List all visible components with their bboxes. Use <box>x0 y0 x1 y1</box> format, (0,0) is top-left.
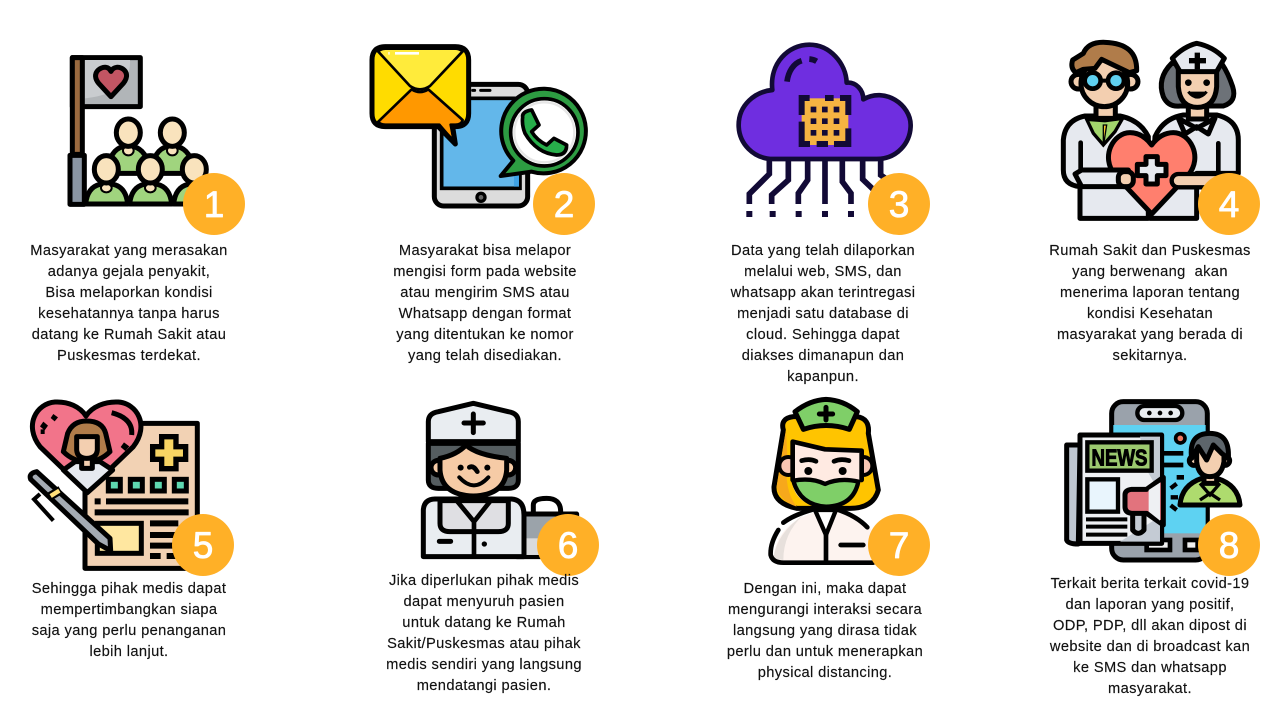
badge 5: 5 <box>193 525 213 566</box>
text block: step 7: physical distancing. <box>758 665 892 681</box>
text block: step 6: Jika diperlukan pihak medis <box>389 573 579 589</box>
text block: step 4: menerima laporan tentang <box>1060 285 1240 301</box>
icon: cloud database <box>739 45 911 217</box>
text block: step 6: mendatangi pasien. <box>417 678 551 694</box>
text block: step 8 <box>1049 576 1250 697</box>
text block: step 7: langsung yang dirasa tidak <box>733 623 917 639</box>
text block: step 1: Masyarakat yang merasakan <box>30 243 228 259</box>
text block: step 1 <box>30 243 228 364</box>
text block: step 2: Masyarakat bisa melapor <box>399 243 571 259</box>
text block: step 2: yang ditentukan ke nomor <box>396 327 574 343</box>
text block: step 3: Data yang telah dilaporkan <box>731 243 915 259</box>
text block: step 8: website dan di broadcast kan <box>1049 639 1250 655</box>
text block: step 3: diakses dimanapun dan <box>742 348 904 364</box>
text block: step 8: ODP, PDP, dll akan dipost di <box>1053 618 1247 634</box>
badge 4: 4 <box>1219 184 1239 225</box>
text block: step 7: perlu dan untuk menerapkan <box>727 644 923 660</box>
text block: step 1: Puskesmas terdekat. <box>57 348 201 364</box>
text block: step 4: kondisi Kesehatan <box>1087 306 1213 322</box>
text block: step 7: mengurangi interaksi secara <box>728 602 923 618</box>
icon: tablet, envelope and chat <box>372 47 586 206</box>
text block: step 3: kapanpun. <box>787 369 859 385</box>
text block: step 3: whatsapp akan terintregasi <box>730 285 915 301</box>
icon: nurse with medical bag <box>423 403 577 557</box>
text block: step 5: lebih lanjut. <box>90 644 168 660</box>
icon: newspaper, phone and megaphone <box>1067 402 1240 560</box>
text block: step 2: mengisi form pada website <box>393 264 577 280</box>
text block: step 8: ke SMS dan whatsapp <box>1073 660 1227 676</box>
badge 6: 6 <box>558 525 578 566</box>
text block: step 1: Bisa melaporkan kondisi <box>45 285 213 301</box>
badge 3 <box>868 173 930 235</box>
text block: step 4 <box>1049 243 1251 364</box>
text block: step 4: yang berwenang akan <box>1072 264 1228 280</box>
text block: step 2: yang telah disediakan. <box>408 348 562 364</box>
badge 7: 7 <box>889 525 909 566</box>
text block: step 2: Whatsapp dengan format <box>399 306 571 322</box>
badge 2: 2 <box>554 184 574 225</box>
text block: step 5: mempertimbangkan siapa <box>41 602 218 618</box>
text block: step 6: untuk datang ke Rumah <box>402 615 566 631</box>
text block: step 5 <box>32 581 226 660</box>
icon: masked nurse <box>771 399 878 563</box>
text block: step 8: Terkait berita terkait covid-19 <box>1051 576 1249 592</box>
badge 1 <box>183 173 245 235</box>
text block: step 2 <box>393 243 577 364</box>
icon: newspaper, phone and megaphone: NEWS <box>1091 444 1147 470</box>
badge 8 <box>1198 514 1260 576</box>
badge 7 <box>868 514 930 576</box>
badge 8: 8 <box>1219 525 1239 566</box>
text block: step 4: sekitarnya. <box>1113 348 1187 364</box>
text block: step 6: medis sendiri yang langsung <box>386 657 582 673</box>
badge 3: 3 <box>889 184 909 225</box>
text block: step 3: cloud. Sehingga dapat <box>746 327 900 343</box>
text block: step 6 <box>386 573 582 694</box>
text block: step 8: dan laporan yang positif, <box>1066 597 1234 613</box>
icon: flag with people <box>70 58 216 206</box>
badge 4 <box>1198 173 1260 235</box>
text block: step 1: datang ke Rumah Sakit atau <box>32 327 226 343</box>
text block: step 3: melalui web, SMS, dan <box>744 264 902 280</box>
text block: step 2: atau mengirim SMS atau <box>400 285 570 301</box>
text block: step 7: Dengan ini, maka dapat <box>744 581 906 597</box>
text block: step 5: saja yang perlu penanganan <box>32 623 226 639</box>
text block: step 3 <box>730 243 915 385</box>
badge 5 <box>172 514 234 576</box>
icon: doctor and nurse holding heart <box>1063 42 1238 218</box>
text block: step 4: Rumah Sakit dan Puskesmas <box>1049 243 1251 259</box>
text block: step 1: adanya gejala penyakit, <box>48 264 210 280</box>
text block: step 8: masyarakat. <box>1108 681 1192 697</box>
badge 2 <box>533 173 595 235</box>
text block: step 7 <box>727 581 923 681</box>
icon: medical form with heart and pen <box>30 402 197 568</box>
badge 6 <box>537 514 599 576</box>
text block: step 5: Sehingga pihak medis dapat <box>32 581 226 597</box>
text block: step 6: dapat menyuruh pasien <box>404 594 564 610</box>
text block: step 6: Sakit/Puskesmas atau pihak <box>387 636 581 652</box>
badge 1: 1 <box>204 184 224 225</box>
text block: step 1: kesehatannya tanpa harus <box>38 306 220 322</box>
text block: step 4: masyarakat yang berada di <box>1057 327 1243 343</box>
text block: step 3: menjadi satu database di <box>737 306 909 322</box>
